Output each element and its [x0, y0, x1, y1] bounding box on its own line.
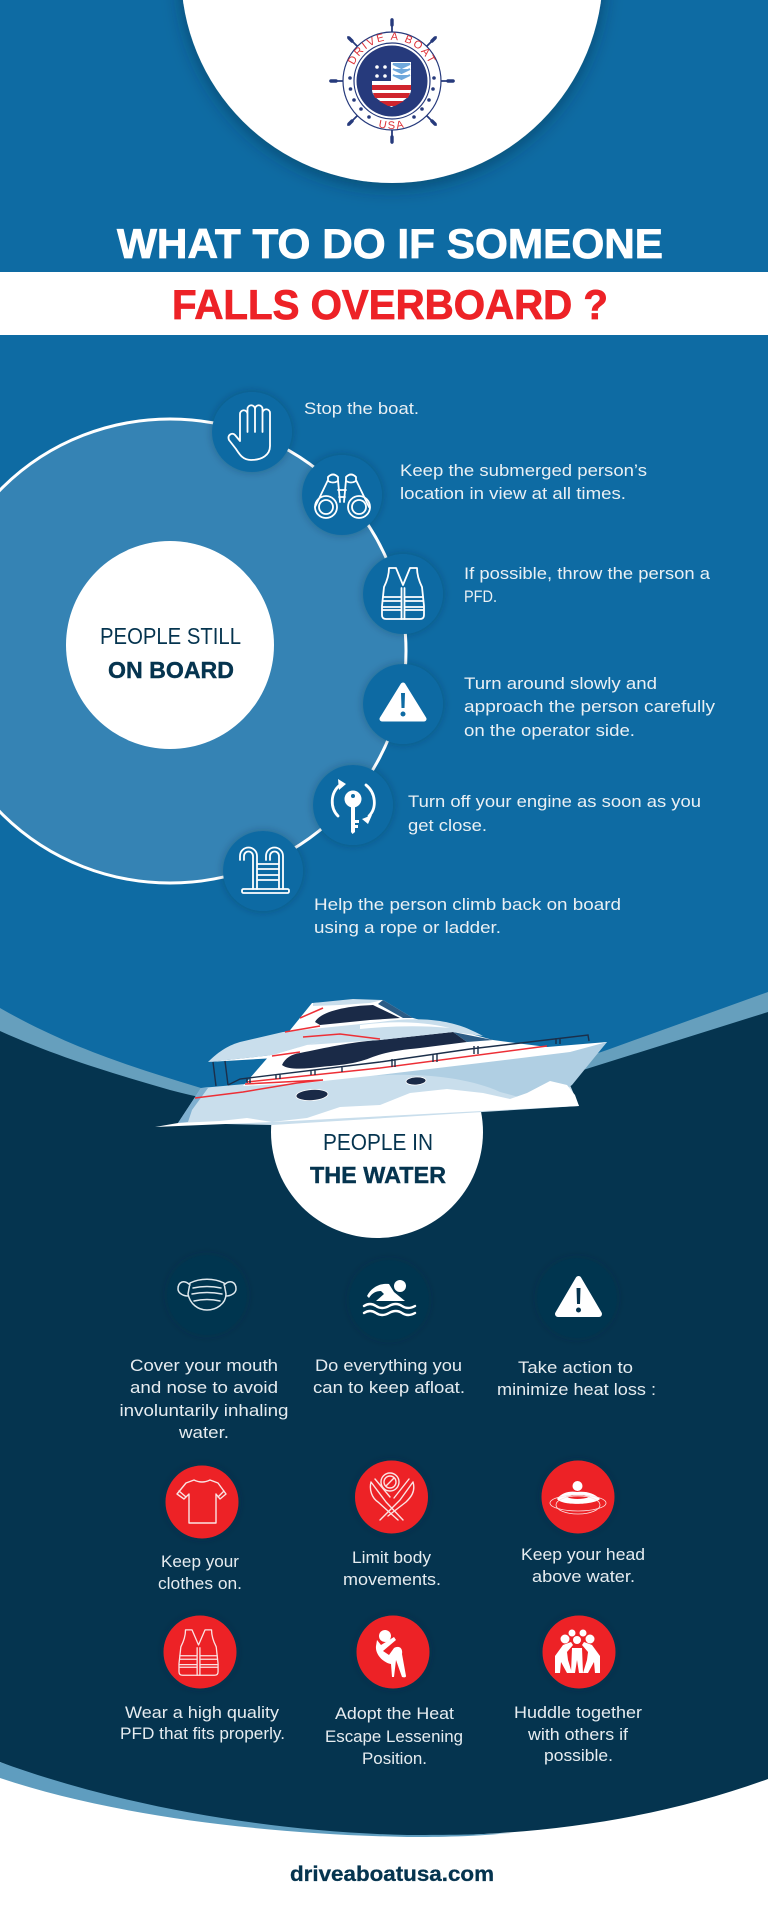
- item: t-shirt: [158, 1466, 242, 1593]
- water: light wave band: [0, 992, 768, 1120]
- step 4: warning: [363, 664, 716, 744]
- title line 1: WHAT TO DO IF SOMEONE: [117, 220, 663, 267]
- item: head above water: above water.: [532, 1567, 635, 1586]
- item: limit movements: [343, 1460, 441, 1589]
- water foam: [155, 1081, 579, 1127]
- logo: Drive A Boat USA: USA: [379, 120, 404, 130]
- people in the water circle: PEOPLE IN: [323, 1129, 433, 1155]
- step 4: warning: on the operator side.: [464, 721, 635, 740]
- item: t-shirt: Keep your: [161, 1552, 239, 1571]
- main window: [282, 1032, 467, 1069]
- railing: [213, 1035, 589, 1086]
- title white band: [0, 272, 768, 335]
- item: huddle together: [514, 1616, 642, 1765]
- middle deck roof: [208, 1019, 483, 1062]
- step 2: binoculars: [302, 455, 647, 535]
- item: huddle together: Huddle together: [514, 1703, 642, 1722]
- step 6: ladder: Help the person climb back on board: [314, 895, 621, 914]
- upper roof: [313, 999, 383, 1006]
- item: warning: [497, 1258, 656, 1399]
- item: swimmer: [313, 1260, 465, 1397]
- title line 2: FALLS OVERBOARD ?: [172, 281, 608, 328]
- item: limit movements: movements.: [343, 1570, 441, 1589]
- step 4: warning: Turn around slowly and: [464, 674, 657, 693]
- item: head above water: [521, 1460, 645, 1586]
- item: mask: and nose to avoid: [130, 1378, 278, 1397]
- step 3: life vest: PFD.: [464, 587, 497, 606]
- people in the water circle: THE WATER: [310, 1162, 446, 1188]
- item: limit movements: Limit body: [352, 1548, 432, 1567]
- item: mask: involuntarily inhaling: [120, 1401, 288, 1420]
- footer website: driveaboatusa.com: [290, 1863, 494, 1886]
- big circle with ring: [0, 419, 406, 883]
- item: heat escape position: Adopt the Heat: [335, 1704, 454, 1723]
- item: quality PFD: PFD that fits properly.: [120, 1724, 285, 1743]
- item: heat escape position: Escape Lessening: [325, 1727, 463, 1746]
- logo: Drive A Boat USA: [329, 18, 455, 144]
- panel: people in the water items: [120, 1255, 656, 1768]
- item: mask: Cover your mouth: [130, 1356, 278, 1375]
- hull: [178, 1042, 607, 1125]
- item: quality PFD: Wear a high quality: [125, 1703, 280, 1722]
- step 5: key: Turn off your engine as soon as you: [408, 792, 701, 811]
- step 5: key: [313, 765, 701, 845]
- item: head above water: Keep your head: [521, 1545, 645, 1564]
- item: huddle together: with others if: [527, 1725, 628, 1744]
- item: t-shirt: clothes on.: [158, 1574, 242, 1593]
- step 5: key: get close.: [408, 816, 487, 835]
- background: white footer: [0, 1700, 768, 1920]
- bottom light wave strip: [0, 1762, 510, 1837]
- item: huddle together: possible.: [544, 1746, 613, 1765]
- item: mask: water.: [178, 1423, 229, 1442]
- portholes: [296, 1088, 328, 1102]
- illustration: yacht: [155, 999, 607, 1127]
- panel: people still on board: [0, 392, 716, 937]
- step 3: life vest: [363, 554, 711, 634]
- upper window: [315, 1005, 400, 1025]
- step 2: binoculars: Keep the submerged person’s: [400, 461, 647, 480]
- superstructure white: [243, 1000, 607, 1086]
- item: warning: minimize heat loss :: [497, 1380, 656, 1399]
- header white circle: [181, 0, 603, 183]
- center circle label: ON BOARD: [108, 657, 234, 683]
- people in the water circle: [271, 1026, 483, 1238]
- background: upper blue: [0, 0, 768, 1300]
- water: dark navy section: [0, 1012, 768, 1836]
- item: heat escape position: [325, 1616, 463, 1768]
- step 4: warning: approach the person carefully: [464, 697, 716, 716]
- step 1: stop: Stop the boat.: [304, 399, 419, 418]
- step 2: binoculars: location in view at all times.: [400, 484, 626, 503]
- center circle label: [66, 541, 274, 749]
- bottom white under wave: [0, 1778, 407, 1840]
- item: quality PFD: [120, 1616, 285, 1743]
- item: mask: [120, 1255, 288, 1442]
- item: swimmer: Do everything you: [315, 1356, 462, 1375]
- step 3: life vest: If possible, throw the person a: [464, 564, 711, 583]
- logo: Drive A Boat USA: DRIVE A BOAT: [348, 32, 436, 64]
- item: heat escape position: Position.: [362, 1749, 427, 1768]
- item: warning: Take action to: [518, 1358, 633, 1377]
- step 6: ladder: [223, 831, 621, 937]
- step 1: stop: [212, 392, 419, 472]
- red trim: [195, 1008, 547, 1098]
- center circle label: PEOPLE STILL: [100, 623, 241, 649]
- item: swimmer: can to keep afloat.: [313, 1378, 465, 1397]
- step 6: ladder: using a rope or ladder.: [314, 918, 501, 937]
